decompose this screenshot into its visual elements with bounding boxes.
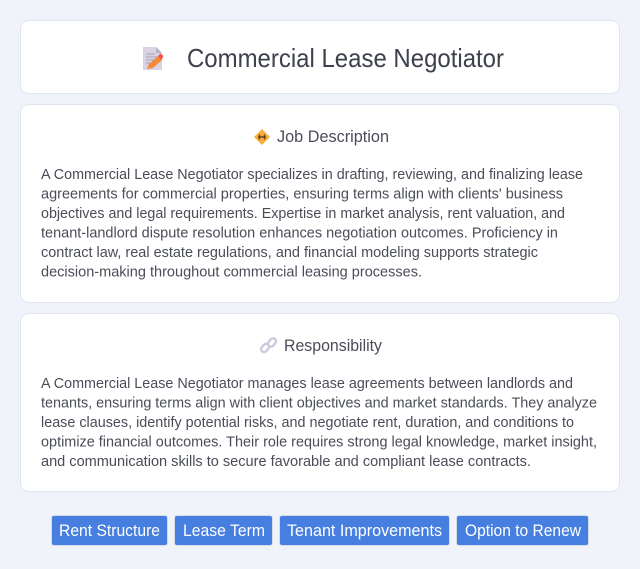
- text block: job description: A Commercial Lease Negotiator specializes in drafting, reviewing, and finalizing lease: [41, 167, 583, 183]
- tag: lease term: [174, 516, 272, 546]
- panel: job description: [20, 104, 620, 302]
- heading: job description: Job Description: [277, 128, 389, 146]
- text block: job description: contract law, real estate regulations, and financial modeling supports strategic: [41, 245, 538, 261]
- panel: title header: [20, 20, 620, 94]
- tag: tenant improvements: [280, 516, 450, 546]
- text block: responsibility: A Commercial Lease Negotiator manages lease agreements between landlords and: [41, 376, 573, 392]
- tag: rent structure: Rent Structure: [59, 521, 160, 540]
- text block: job description: [41, 167, 583, 280]
- text block: responsibility: lease clauses, identify potential risks, and negotiate rent, duration, and conditions to: [41, 415, 574, 431]
- text block: job description: agreements for commercial properties, ensuring terms align with clients' business: [41, 186, 563, 202]
- heading: responsibility: Responsibility: [284, 337, 383, 355]
- tag: tenant improvements: Tenant Improvements: [287, 521, 442, 540]
- tag: option to renew: Option to Renew: [465, 521, 582, 540]
- title: Commercial Lease Negotiator: [187, 45, 504, 73]
- text block: responsibility: [41, 376, 597, 470]
- text block: job description: objectives and legal requirements. Expertise in market analysis, rent valuation, and: [41, 206, 565, 222]
- icon: orange diamond sign: [254, 129, 270, 145]
- text block: responsibility: tenants, ensuring terms align with client objectives and market standards. They analyze: [41, 396, 597, 412]
- icon: memo with pencil: [143, 47, 164, 70]
- panel: responsibility: [20, 314, 620, 492]
- tag: lease term: Lease Term: [183, 521, 265, 540]
- text block: responsibility: optimize financial outcomes. Their role requires strong legal knowledge, market insight,: [41, 434, 597, 450]
- icon: chain link: [260, 337, 277, 353]
- tag: option to renew: [456, 516, 588, 546]
- text block: responsibility: and communication skills to secure favorable and compliant lease contracts.: [41, 454, 531, 470]
- tag: rent structure: [52, 516, 168, 546]
- text block: job description: decision-making throughout commercial leasing processes.: [41, 264, 422, 280]
- tag row: [52, 516, 588, 546]
- text block: job description: tenant-landlord dispute resolution enhances negotiation outcomes. Proficiency in: [41, 226, 558, 242]
